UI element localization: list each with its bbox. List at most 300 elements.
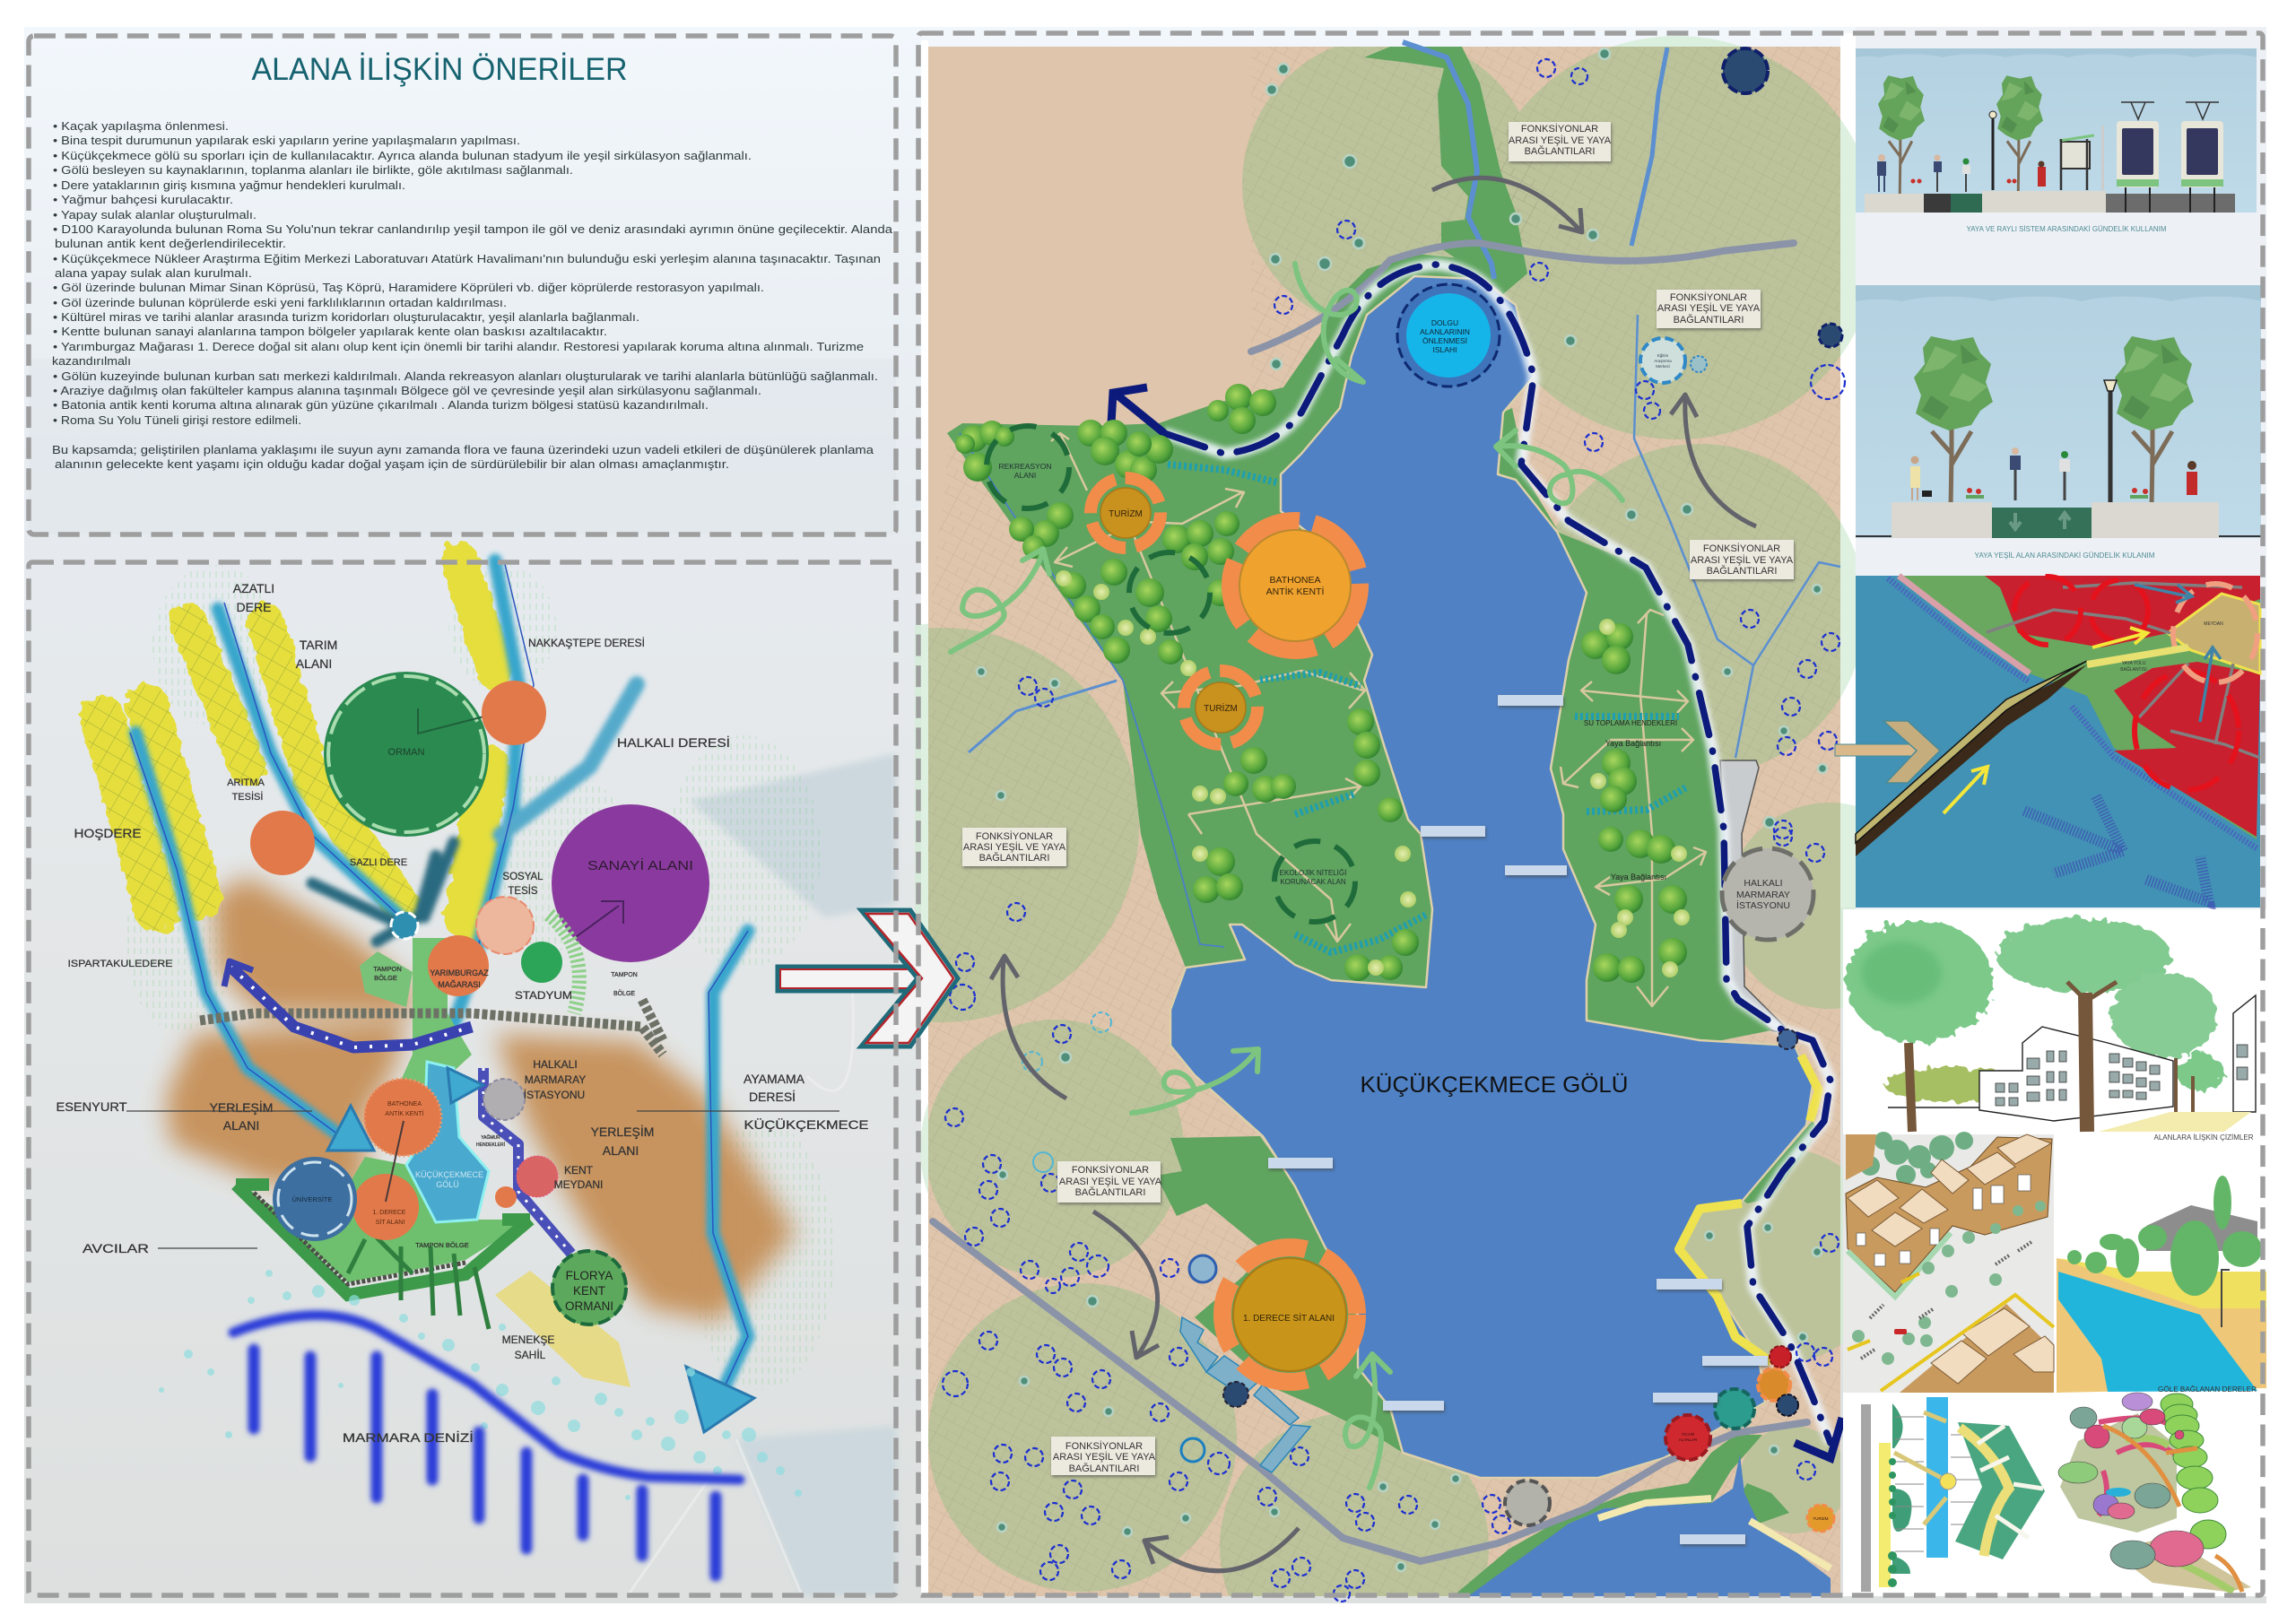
gray station marker xyxy=(1505,1481,1550,1525)
path across water xyxy=(1894,1412,1948,1524)
diagram labels: ALANI xyxy=(603,1143,639,1158)
bullet list: • Yağmur bahçesi kurulacaktır. xyxy=(53,193,233,206)
label text east: BAĞLANTILARI xyxy=(1707,565,1777,577)
pedestrian route xyxy=(224,961,571,1254)
Yarımburgaz node xyxy=(428,935,489,996)
small blue marker xyxy=(1691,356,1707,372)
bullet list: • Bina tespit durumunun yapılarak eski yapıların yerine yapılaşmaların yapılması. xyxy=(53,134,520,147)
label text northeast: ARASI YEŞİL VE YAYA xyxy=(1657,302,1761,314)
sea spray xyxy=(159,1270,802,1500)
coastal dots xyxy=(1888,578,2257,848)
tram stop shelter xyxy=(2059,126,2104,190)
street base xyxy=(1843,1134,2054,1393)
diagram labels: SAHİL xyxy=(515,1349,546,1361)
label text west: ARASI YEŞİL VE YAYA xyxy=(963,841,1066,853)
strip hatching lines xyxy=(103,622,401,910)
sketch: garden plan xyxy=(2058,1393,2251,1592)
diagram labels: TAMPON xyxy=(611,972,638,978)
bullet list: Bu kapsamda; geliştirilen planlama yaklaşımı ile suyun aynı zamanda flora ve fauna üzerindeki uzun vadeli etkileri de düşünülerek planlama xyxy=(52,443,874,456)
diagram labels: HENDEKLERİ xyxy=(476,1142,505,1148)
caption: YAYA VE RAYLI SİSTEM ARASINDAKİ GÜNDELİK KULLANIM xyxy=(1966,225,2167,233)
panel: master plan map xyxy=(928,39,1846,1603)
sky xyxy=(1856,285,2261,538)
diagram labels: MARMARA DENİZİ xyxy=(343,1429,474,1445)
bullet list: • Batonia antik kenti koruma altına alınarak gün yüzüne çıkarılmalı . Alanda turizm bölgesi statüsü kazandırılmalı. xyxy=(53,398,709,412)
bullet list: • Yapay sulak alanlar oluşturulmalı. xyxy=(53,208,257,221)
Florya forest: ORMANI xyxy=(565,1299,613,1313)
label text south: BAĞLANTILARI xyxy=(1069,1463,1139,1474)
caption: ALANLARA İLİŞKİN ÇİZİMLER xyxy=(2154,1133,2254,1142)
diagram labels: MARMARAY xyxy=(525,1073,586,1086)
Halkalı Marmaray station: HALKALI xyxy=(1744,878,1783,889)
internal roads xyxy=(1987,583,2260,758)
piers xyxy=(1268,695,1768,1544)
path xyxy=(2099,1112,2251,1132)
caption: YAYA YEŞİL ALAN ARASINDAKİ GÜNDELİK KULANIM xyxy=(1975,551,2155,560)
tourism node north: TURİZM xyxy=(1109,508,1143,519)
rivers xyxy=(135,560,748,1411)
fill area improvement: DOLGU xyxy=(1431,318,1458,327)
Bathonea node: BATHONEA xyxy=(387,1101,422,1107)
leader lines xyxy=(126,1111,839,1248)
yellow paths and white gaps xyxy=(1960,1426,2043,1556)
lamp xyxy=(1991,115,1995,190)
tourism node south: TURİZM xyxy=(1204,702,1238,714)
white sketches background xyxy=(1843,909,2266,1596)
upper street trees xyxy=(1860,1132,1973,1185)
clouds xyxy=(1856,48,2257,57)
Bathonea antique city: ANTİK KENTİ xyxy=(1266,586,1324,597)
station marker xyxy=(1778,1029,1797,1049)
small lake: KÜÇÜKÇEKMECE xyxy=(415,1170,483,1179)
diagram labels: ESENYURT xyxy=(56,1099,127,1114)
label text southwest: FONKSİYONLAR xyxy=(1072,1164,1149,1176)
small lake: GÖLÜ xyxy=(436,1180,459,1189)
woman in red xyxy=(2187,461,2197,495)
shoreline greenway glow xyxy=(1164,265,1831,1443)
square xyxy=(2168,594,2260,673)
land xyxy=(1899,576,2260,839)
trees xyxy=(1878,75,2043,194)
light green loop arrows xyxy=(951,264,1622,1488)
park annotations: Yaya Bağlantısı xyxy=(1605,739,1661,748)
panel: bridge detail plan xyxy=(1856,576,2260,908)
panel: recommendations text xyxy=(29,52,896,534)
label text northeast: FONKSİYONLAR xyxy=(1670,291,1747,303)
green neighbourhood circles xyxy=(928,47,1840,1596)
pedestrian with dog xyxy=(1910,456,1932,500)
blue dashed facility markers xyxy=(943,59,1845,1602)
trams xyxy=(2117,102,2223,213)
tiny map labels: MEYDAN xyxy=(2204,621,2223,627)
trunks xyxy=(1909,982,2193,1132)
urban fabric texture xyxy=(928,47,1840,1596)
sand banks xyxy=(2057,1258,2266,1393)
label text west: BAĞLANTILARI xyxy=(979,852,1049,864)
Bathonea antique city: BATHONEA xyxy=(1270,575,1320,586)
diagram labels: TESİSİ xyxy=(232,791,263,803)
pavement xyxy=(1856,502,2261,538)
park annotations xyxy=(1584,719,1677,881)
gray flow arrows xyxy=(991,178,1756,1571)
label text north: BAĞLANTILARI xyxy=(1525,145,1595,157)
green lawn bands xyxy=(2126,1438,2233,1592)
forest circle xyxy=(324,672,508,837)
diagram labels: STADYUM xyxy=(515,989,572,1002)
river centre lines xyxy=(130,560,748,1411)
orange node xyxy=(482,681,546,745)
green nodes xyxy=(977,48,1827,1571)
small lake xyxy=(406,1062,489,1222)
SE tourism marker: TURİZM xyxy=(1813,1515,1829,1521)
shore strip xyxy=(1899,576,2030,673)
diagram labels xyxy=(56,581,868,1445)
east park xyxy=(1551,532,1771,1045)
lake name: KÜÇÜKÇEKMECE GÖLÜ xyxy=(1360,1073,1629,1098)
streams xyxy=(960,42,1840,947)
pale trees xyxy=(1056,570,1690,977)
blue water chevrons xyxy=(2024,796,2209,902)
lamp xyxy=(2222,1269,2230,1327)
small red marker xyxy=(1770,1346,1791,1368)
diagram labels: YAĞMUR xyxy=(481,1134,500,1141)
sketch: tree lined street xyxy=(1846,917,2256,1142)
diagram labels: ALANI xyxy=(223,1118,259,1133)
Bathonea node xyxy=(364,1079,441,1156)
diagram labels: AZATLI xyxy=(233,581,274,595)
sky xyxy=(1856,48,2257,213)
bullet list: • Kültürel miras ve tarihi alanlar arasında turizm koridorları oluşturulacaktır, yeşil alanlarla bağlanmalı. xyxy=(53,310,639,324)
tiny map labels: YAYA YOLU xyxy=(2122,661,2146,666)
paths xyxy=(2103,1426,2242,1592)
bridge xyxy=(1856,661,2087,856)
bullet list: • D100 Karayolunda bulunan Roma Su Yolu'nun tekrar canlandırılıp yeşil tampon ile göl ve deniz arasındaki ayrımın önüne geçilecektir. Alanda xyxy=(53,222,893,236)
southeast green patch xyxy=(1738,1483,1789,1524)
city square xyxy=(517,1156,558,1197)
lime tree chain xyxy=(2161,1394,2226,1549)
west park xyxy=(947,254,1480,987)
diagram labels: YERLEŞİM xyxy=(210,1099,273,1115)
steel blue arrows xyxy=(2135,585,2221,722)
shoreline greenway dashes xyxy=(1164,265,1831,1443)
diagram labels: DERE xyxy=(237,600,271,614)
Marmara current bars xyxy=(254,1350,716,1576)
label text east xyxy=(1691,543,1794,577)
diagram labels: HALKALI xyxy=(533,1058,578,1071)
flowers xyxy=(1966,488,2148,499)
crosswalk marks xyxy=(1861,1242,2031,1359)
Bathonea node: ANTİK KENTİ xyxy=(385,1109,424,1117)
Florya forest: FLORYA xyxy=(566,1269,613,1282)
yellow arrows xyxy=(1944,628,2147,813)
diagram labels: KÜÇÜKÇEKMECE xyxy=(744,1116,868,1132)
Halkalı Marmaray station: İSTASYONU xyxy=(1736,899,1790,911)
diagram labels: ARITMA xyxy=(227,777,265,788)
diagram labels: ISPARTAKULEDERE xyxy=(68,959,172,969)
buildings xyxy=(1846,1137,2052,1292)
label text south: ARASI YEŞİL VE YAYA xyxy=(1053,1451,1156,1463)
orange tourism marker xyxy=(1758,1368,1790,1401)
sketch: isometric blocks xyxy=(1843,1132,2054,1393)
roads xyxy=(933,243,1807,1561)
Florya forest: KENT xyxy=(573,1284,605,1298)
diagram labels: MENEKŞE xyxy=(502,1333,554,1346)
building xyxy=(1888,995,2256,1121)
diagram labels: NAKKAŞTEPE DERESİ xyxy=(528,638,645,649)
residential zones xyxy=(166,876,796,1322)
diagram labels: İSTASYONU xyxy=(524,1089,585,1101)
pond xyxy=(2106,1488,2131,1497)
social facility xyxy=(476,897,534,954)
bullet list: • Kentte bulunan sanayi alanlarına tampon bölgeler yapılarak kente olan baskısı azaltılacaktır. xyxy=(53,325,607,338)
tourism node north xyxy=(1091,478,1161,548)
lower roofs xyxy=(1931,1308,2054,1384)
sketch: waterway plan xyxy=(1861,1397,2045,1592)
lamp head xyxy=(1989,111,1996,118)
salmon dashed ring xyxy=(2173,584,2257,682)
arrow from map to detail xyxy=(1835,721,1940,783)
tiny map labels: BAĞLANTISI xyxy=(2120,666,2147,673)
bullet list: • Dere yataklarının giriş kısmına yağmur hendekleri kurulmalı. xyxy=(53,178,405,192)
cyan ring markers xyxy=(1022,1012,1205,1462)
car xyxy=(1894,1329,1907,1334)
street trees xyxy=(1852,1201,2046,1365)
label text northeast xyxy=(1657,291,1761,326)
ecological protection ring: EKOLOJİK NİTELİĞİ xyxy=(1280,869,1346,877)
label text north xyxy=(1509,123,1612,157)
lamp xyxy=(2104,380,2117,502)
first degree site area: 1. DERECE SİT ALANI xyxy=(1243,1312,1335,1324)
Halkalı Marmaray station: MARMARAY xyxy=(1736,890,1790,900)
pale circle halos beside the map xyxy=(915,36,1856,1344)
bullet list: alanının gelecekte kent yaşamı için olduğu kadar doğal yaşam için de sürdürülebilir bir alan olması amaçlanmıştır. xyxy=(55,457,729,471)
triangle markers xyxy=(327,1068,754,1432)
yellow kerb xyxy=(1848,1273,2054,1391)
aerial roads xyxy=(628,986,853,1595)
small navy marker xyxy=(1777,1394,1798,1416)
green hatching xyxy=(126,565,834,1390)
sketch: canal xyxy=(2057,1176,2266,1394)
first degree site: SİT ALANI xyxy=(376,1218,404,1226)
diagram labels: YERLEŞİM xyxy=(591,1124,654,1139)
label text east: FONKSİYONLAR xyxy=(1703,543,1780,554)
SE tourism marker xyxy=(1807,1505,1834,1532)
beaches xyxy=(1598,1055,1831,1568)
bullet list: • Küçükçekmece gölü su sporları için de kullanılacaktır. Ayrıca alanda bulunan stadyum ile yeşil sirkülasyon sağlanmalı. xyxy=(53,149,752,162)
commercial red marker xyxy=(1665,1415,1710,1460)
label: links north xyxy=(1509,122,1611,161)
bullet list: • Göl üzerinde bulunan köprülerde eski yeni farklılıklarının ortadan kaldırılması. xyxy=(53,296,507,309)
diagram labels: HALKALI DERESİ xyxy=(617,734,730,750)
aerial backdrop water xyxy=(690,753,896,1595)
white strips beside map xyxy=(921,33,1856,1596)
label text west xyxy=(963,830,1066,864)
green humps xyxy=(1892,1403,1911,1574)
diagram labels: KENT xyxy=(564,1164,594,1177)
bullet list: • Gölü besleyen su kaynaklarının, toplanma alanları ile birlikte, göle akıtılması sağlanmalı. xyxy=(53,163,573,177)
diagram labels: SOSYAL xyxy=(502,872,544,882)
fill area improvement: ÖNLENMESİ xyxy=(1422,336,1467,345)
Halkalı Marmaray station xyxy=(1722,848,1813,940)
diagram labels: TESİS xyxy=(508,885,538,897)
confluence ring xyxy=(391,912,418,939)
label: links east xyxy=(1690,540,1794,579)
clouds xyxy=(1856,285,2261,301)
diagram labels: BÖLGE xyxy=(613,990,635,997)
first degree site: 1. DERECE xyxy=(373,1210,406,1216)
water xyxy=(1856,576,2260,908)
diagram labels: MAĞARASI xyxy=(438,980,481,989)
station precinct xyxy=(1720,760,1794,1036)
buffer zone xyxy=(360,951,413,1007)
label text southwest xyxy=(1059,1164,1162,1198)
bullet list xyxy=(52,119,893,471)
research centre marker xyxy=(1640,338,1685,383)
ecological protection ring xyxy=(1274,841,1355,922)
east shore strip xyxy=(1498,408,1557,529)
diagram labels: TARIM xyxy=(300,638,337,652)
bullet list: • Göl üzerinde bulunan Mimar Sinan Köprüsü, Taş Köprü, Haramidere Köprüleri vb. diğer köprülerde restorasyon yapılmalı. xyxy=(53,281,764,294)
cyclists xyxy=(2010,447,2070,500)
diagram labels: HOŞDERE xyxy=(74,826,142,840)
Halkalı station node xyxy=(483,1079,525,1120)
diagram labels: TAMPON xyxy=(373,965,402,973)
research centre marker: Eğitim xyxy=(1657,353,1668,358)
windows xyxy=(1996,1045,2248,1106)
treatment node xyxy=(250,811,315,875)
bullet list: kazandırılmalı xyxy=(52,354,131,368)
sea inlet xyxy=(1468,1455,1831,1596)
teal marker xyxy=(1715,1389,1754,1429)
green belt xyxy=(236,1157,530,1329)
top left building xyxy=(1846,1134,1876,1180)
label text north: FONKSİYONLAR xyxy=(1521,123,1598,135)
label text northeast: BAĞLANTILARI xyxy=(1674,314,1744,326)
diagram labels: DERESİ xyxy=(749,1089,796,1104)
bullet list: • Küçükçekmece Nükleer Araştırma Eğitim Merkezi Laboratuvarı Atatürk Havalimanı'nın bulunduğu eski yerleşim alanına taşınacaktır. Taşınan xyxy=(53,252,881,265)
Florya forest xyxy=(552,1250,627,1325)
university: ÜNİVERSİTE xyxy=(291,1195,333,1203)
diagram labels: AVCILAR xyxy=(83,1242,149,1255)
lake xyxy=(1170,276,1813,1478)
buffer green around stadium xyxy=(549,915,579,1013)
fill area improvement: ALANLARININ xyxy=(1420,327,1470,336)
research centre marker: Merkezi xyxy=(1656,364,1670,369)
diagram labels: YARIMBURGAZ xyxy=(430,968,489,977)
navy circle marker xyxy=(1223,1382,1248,1407)
walking paths in parks xyxy=(1051,433,1706,1006)
small orange node xyxy=(495,1186,517,1208)
bullet list: bulunan antik kent değerlendirilecektir. xyxy=(55,237,286,250)
label: links northeast xyxy=(1657,290,1761,328)
panel: conceptual diagram xyxy=(56,560,896,1595)
north green corridor xyxy=(1364,47,1527,294)
label: links west xyxy=(962,828,1066,866)
first degree site xyxy=(352,1121,419,1240)
navy marker xyxy=(1819,324,1842,347)
blue buildings xyxy=(1180,1317,1310,1472)
right column pale background xyxy=(1856,27,2266,909)
lower buildings xyxy=(1900,1304,2054,1393)
caption: GÖLE BAĞLANAN DERELER xyxy=(2158,1385,2257,1394)
recreation ring: REKREASYON xyxy=(998,462,1052,471)
windows xyxy=(1857,1175,2031,1266)
diagram labels: MEYDANI xyxy=(554,1178,603,1191)
route arrowheads xyxy=(1111,387,1842,1458)
green parks xyxy=(947,47,1819,1596)
pedestrian connection xyxy=(2087,647,2188,664)
pavement and lanes xyxy=(1865,191,2235,213)
label: links southwest xyxy=(1057,1161,1161,1203)
label text south: FONKSİYONLAR xyxy=(1065,1440,1143,1452)
Marmara coast line xyxy=(233,1316,740,1480)
trees xyxy=(2067,1176,2262,1296)
stadium xyxy=(521,942,562,983)
flowers xyxy=(1910,179,2016,183)
canopy shading xyxy=(1861,942,1942,1004)
label text east: ARASI YEŞİL VE YAYA xyxy=(1691,554,1794,566)
commercial red marker: TİCARİ xyxy=(1682,1431,1694,1437)
map base xyxy=(928,47,1840,1596)
upper ground xyxy=(2060,1413,2177,1533)
park annotations: SU TOPLAMA HENDEKLERİ xyxy=(1584,719,1677,727)
lower ground xyxy=(2110,1537,2251,1592)
grass bank xyxy=(2058,1258,2266,1308)
central green xyxy=(395,938,472,1112)
pink terrace bands xyxy=(2099,1418,2179,1515)
commercial red marker: ALANLAR xyxy=(1679,1437,1698,1442)
park annotations: Yaya Bağlantısı xyxy=(1611,873,1666,881)
label text southwest: ARASI YEŞİL VE YAYA xyxy=(1059,1176,1162,1187)
bullet list: • Kaçak yapılaşma önlenmesi. xyxy=(53,119,229,133)
bridge icon marker xyxy=(1189,1255,1216,1282)
label: links south xyxy=(1051,1437,1155,1475)
recreation ring: ALANI xyxy=(1014,471,1036,480)
label text west: FONKSİYONLAR xyxy=(976,830,1053,842)
industrial circle: SANAYİ ALANI xyxy=(587,857,693,873)
panel: street section green xyxy=(1856,285,2261,560)
label text southwest: BAĞLANTILARI xyxy=(1075,1186,1145,1198)
red urban areas xyxy=(1985,576,2260,837)
central ecological ring xyxy=(1129,552,1210,633)
Menekşe beach xyxy=(495,1271,631,1387)
research centre marker: Araştırma xyxy=(1654,359,1672,363)
Bathonea antique city xyxy=(1231,521,1360,650)
recreation ring xyxy=(987,426,1069,508)
canal water xyxy=(2058,1272,2257,1392)
south shore ribbon xyxy=(1453,1435,1762,1596)
tourism node south xyxy=(1184,671,1257,744)
canopies xyxy=(1846,917,2224,1101)
red dashed rings xyxy=(2014,577,2239,790)
tree line xyxy=(200,1000,663,1055)
stadium marker xyxy=(1723,48,1768,93)
southwest green wedge xyxy=(1156,1136,1403,1453)
east shore band xyxy=(1738,1121,1819,1203)
fill area improvement: ISLAHI xyxy=(1433,345,1457,354)
bullet list: alana yapay sulak alan kurulmalı. xyxy=(55,266,252,280)
lane arrows xyxy=(2010,513,2070,529)
university xyxy=(273,1157,357,1241)
bullet list: • Araziye dağılmış olan fakülteler kampus alanına taşınmalı Bölgece göl ve çevresinde yeşil alan sirkülasyonu sağlanmalı. xyxy=(53,384,761,397)
dark confluence xyxy=(312,842,454,942)
diagram labels: SAZLI DERE xyxy=(350,857,407,868)
roundel xyxy=(1940,1473,1956,1489)
people xyxy=(1877,154,2046,192)
aerial haze under text xyxy=(29,359,896,534)
plaza lines xyxy=(1895,1417,1982,1551)
green verge xyxy=(1848,1233,1951,1297)
